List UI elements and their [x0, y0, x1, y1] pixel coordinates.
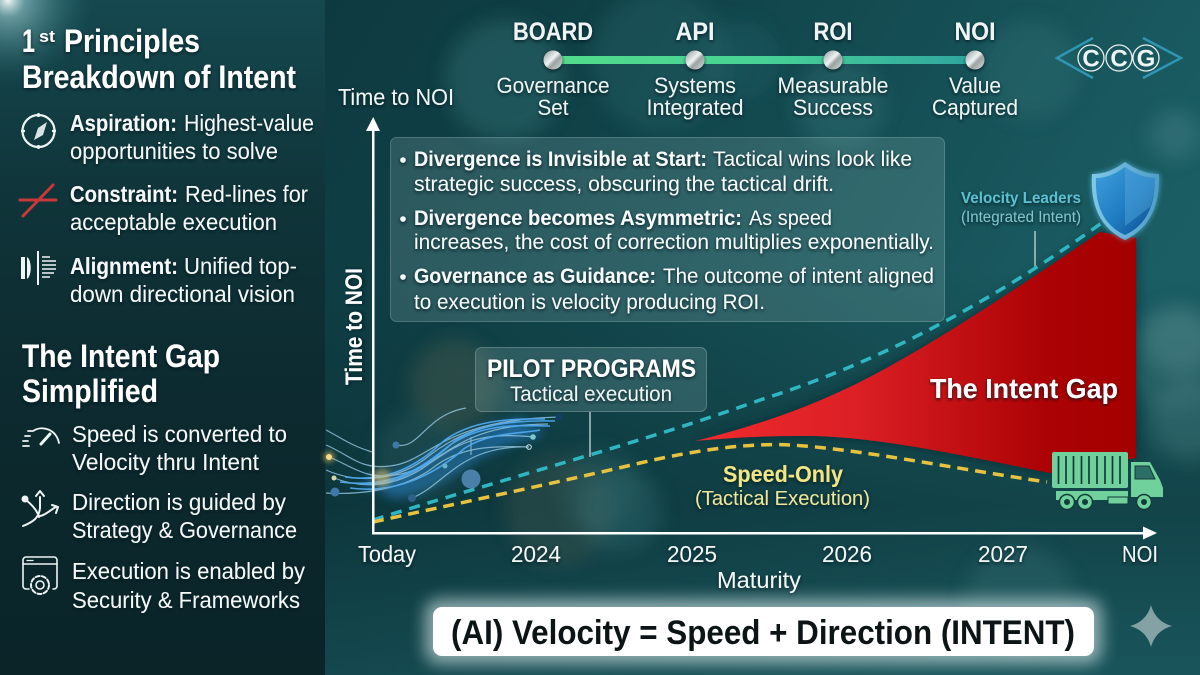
- bullet: divergence invisible: [400, 147, 912, 196]
- milestone: API: Systems: [654, 73, 736, 98]
- text: constraint: acceptable execution: [70, 209, 277, 235]
- text: direction: Direction is guided by: [72, 489, 286, 515]
- label: speed-only: (Tactical Execution): [695, 487, 870, 510]
- logo: CCG: C: [1082, 46, 1100, 72]
- icon: truck: [1052, 452, 1163, 510]
- bullet: divergence asymmetric: As speed: [749, 206, 832, 230]
- text: execution: Execution is enabled by: [72, 558, 305, 584]
- panel: left sidebar: [0, 0, 325, 675]
- callout: pilot programs: PILOT PROGRAMS: [487, 355, 696, 383]
- text: aspiration: Highest-value: [184, 110, 314, 136]
- text: speed: Velocity thru Intent: [72, 449, 260, 475]
- formula banner: (AI) Velocity = Speed + Direction (INTENT): [451, 614, 1075, 652]
- milestone: API: API: [676, 18, 714, 46]
- bullet: governance as guidance: to execution is velocity producing ROI.: [414, 290, 765, 314]
- heading: 1st Principles: Principles: [64, 23, 200, 59]
- text: execution: Security & Frameworks: [72, 587, 300, 613]
- label: the intent gap: The Intent Gap: [930, 373, 1118, 404]
- y-axis rotated label: Time to NOI: [341, 268, 368, 385]
- data stream: nodes: [324, 414, 562, 502]
- text: aspiration: [70, 110, 314, 164]
- icon: speedometer: [23, 428, 59, 446]
- icon: constraint red lines: [20, 185, 56, 216]
- text: direction: Strategy & Governance: [72, 517, 297, 543]
- text: alignment: down directional vision: [70, 281, 295, 307]
- heading: The Intent Gap Simplified: The Intent Gap: [22, 338, 220, 374]
- text: execution: [72, 558, 305, 613]
- bullet: governance as guidance: Governance as Guidance:: [414, 264, 656, 288]
- icon: direction arrows: [22, 491, 58, 526]
- callout: pilot programs: [476, 348, 706, 457]
- x-axis labels: 2024: [511, 541, 561, 567]
- label: velocity leaders: Velocity Leaders: [961, 190, 1081, 207]
- text: aspiration: Aspiration:: [70, 110, 177, 136]
- milestone: BOARD: Set: [538, 95, 568, 120]
- bullet: divergence invisible: strategic success, obscuring the tactical drift.: [414, 172, 834, 196]
- bullet: divergence invisible: Divergence is Invisible at Start:: [414, 147, 707, 171]
- milestone: NOI: Captured: [932, 95, 1018, 120]
- milestone: ROI: ROI: [814, 18, 852, 46]
- bullet: divergence asymmetric: Divergence becomes Asymmetric:: [414, 206, 742, 230]
- bullet: divergence asymmetric: [400, 206, 934, 254]
- heading: 1st Principles: st: [39, 27, 55, 46]
- milestone: BOARD: Governance: [496, 73, 610, 98]
- callout: key points: [390, 138, 944, 322]
- text: speed: Speed is converted to: [72, 421, 287, 447]
- text: constraint: [70, 181, 308, 235]
- label: velocity leaders: [961, 190, 1081, 226]
- line: speed-only (yellow dashed): [373, 445, 1047, 522]
- text: direction: [72, 489, 297, 543]
- text: alignment: Unified top-: [184, 253, 297, 279]
- axes: [366, 117, 1157, 540]
- icon: alignment: [21, 251, 56, 285]
- milestone: NOI: [932, 18, 1018, 120]
- milestone: BOARD: [496, 18, 610, 120]
- icon: shield: [1092, 162, 1159, 240]
- timeline: milestones: [496, 18, 1018, 120]
- y-axis title top: Time to NOI: [338, 84, 454, 110]
- heading: The Intent Gap Simplified: [22, 338, 220, 409]
- logo: CCG: C: [1110, 46, 1128, 72]
- label: velocity leaders: (Integrated Intent): [961, 209, 1081, 226]
- x-axis labels: [358, 541, 1158, 593]
- text: speed: [72, 421, 287, 475]
- heading: The Intent Gap Simplified: Simplified: [22, 373, 158, 409]
- x-axis labels: 2025: [667, 541, 717, 567]
- line: velocity leaders (teal dashed): [373, 222, 1103, 520]
- x-axis labels: 2027: [978, 541, 1028, 567]
- milestone: ROI: [778, 18, 888, 120]
- data stream: flowing lines: [326, 408, 560, 498]
- heading: 1st Principles: [22, 23, 296, 95]
- icon: sparkle star: [1130, 605, 1172, 647]
- milestone: ROI: Success: [793, 95, 873, 120]
- icon: compass: [21, 113, 56, 149]
- text: alignment: Alignment:: [70, 253, 178, 279]
- text: aspiration: opportunities to solve: [70, 138, 278, 164]
- formula banner: [425, 599, 1102, 664]
- label: speed-only: Speed-Only: [723, 461, 843, 487]
- logo: CCG: G: [1137, 46, 1155, 72]
- x-axis labels: Today: [358, 541, 416, 567]
- x-axis labels: 2026: [822, 541, 872, 567]
- x-axis labels: NOI: [1122, 541, 1158, 567]
- milestone: NOI: Value: [949, 73, 1001, 98]
- bullet: divergence invisible: Tactical wins look like: [713, 147, 912, 171]
- logo: CCG: [1057, 38, 1181, 78]
- heading: 1st Principles: 1: [22, 23, 35, 59]
- milestone: BOARD: BOARD: [513, 18, 593, 46]
- milestone: ROI: Measurable: [778, 73, 888, 98]
- area: the intent gap: [695, 232, 1136, 473]
- text: alignment: [70, 253, 297, 307]
- bullet: governance as guidance: The outcome of intent aligned: [663, 264, 934, 288]
- bullet: divergence asymmetric: increases, the cost of correction multiplies exponentially.: [414, 230, 934, 254]
- milestone: API: Integrated: [646, 95, 744, 120]
- x-axis labels: Maturity: [717, 567, 802, 593]
- connector: velocity leaders: [1034, 231, 1036, 270]
- text: constraint: Constraint:: [70, 181, 178, 207]
- callout: pilot programs: Tactical execution: [510, 382, 672, 406]
- icon: browser with gear: [23, 557, 57, 594]
- milestone: NOI: NOI: [954, 18, 996, 46]
- text: constraint: Red-lines for: [185, 181, 308, 207]
- milestone: API: [646, 18, 744, 120]
- bullet: governance as guidance: [400, 264, 934, 314]
- label: speed-only: [695, 461, 870, 510]
- heading: 1st Principles: Breakdown of Intent: [22, 59, 296, 95]
